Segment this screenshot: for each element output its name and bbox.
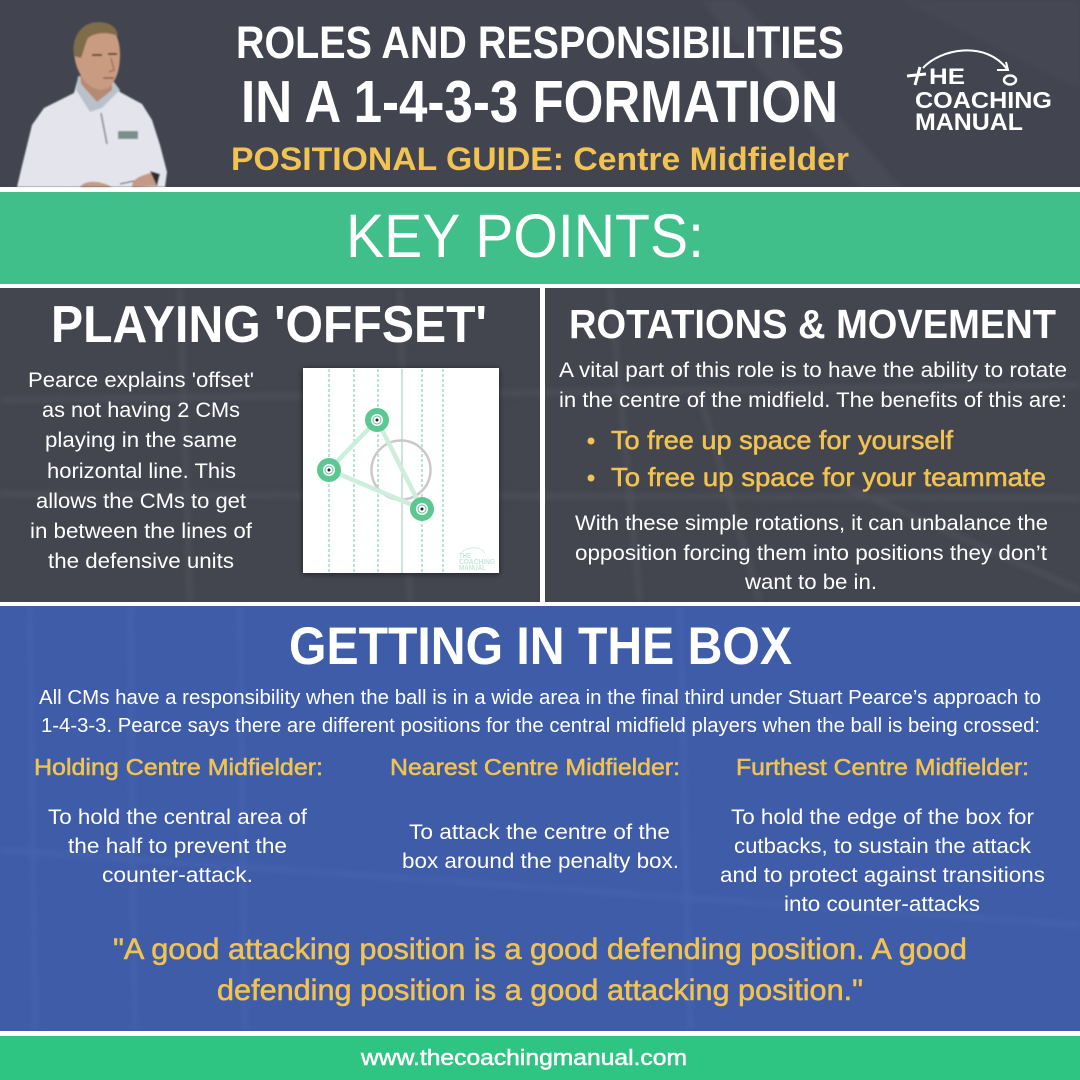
player marker xyxy=(410,497,434,521)
body text xyxy=(28,369,254,573)
diagram watermark logo: THE xyxy=(459,553,471,560)
closing text xyxy=(575,512,1048,594)
player marker xyxy=(365,408,389,432)
logo: The Coaching Manual: MANUAL xyxy=(915,109,1023,136)
column: holding centre midfielder: the half to prevent the xyxy=(68,835,287,858)
logo: The Coaching Manual: HE xyxy=(929,64,965,89)
bullet list: To free up space for yourself xyxy=(611,425,954,455)
intro text: All CMs have a responsibility when the ball is in a wide area in the final third under Stuart Pearce’s approach to xyxy=(39,687,1041,709)
quote xyxy=(113,933,967,1007)
dark panels background xyxy=(0,288,1080,602)
banner heading: KEY POINTS: xyxy=(346,202,704,270)
logo: The Coaching Manual: COACHING xyxy=(915,87,1052,113)
diagram: offset midfield triangle xyxy=(303,368,499,573)
column: nearest centre midfielder: To attack the centre of the xyxy=(409,821,670,844)
column: nearest centre midfielder: box around the penalty box. xyxy=(402,850,679,873)
title: IN A 1-4-3-3 FORMATION xyxy=(241,69,838,135)
player marker xyxy=(317,458,341,482)
column: holding centre midfielder xyxy=(34,754,323,887)
panel: rotations and movement xyxy=(559,301,1067,594)
panel: getting in the box xyxy=(0,606,1080,1031)
panel: playing offset xyxy=(28,296,499,573)
column: furthest centre midfielder: To hold the edge of the box for xyxy=(731,806,1034,829)
subtitle: POSITIONAL GUIDE: Centre Midfielder xyxy=(231,141,849,177)
diagram watermark logo: MANUAL xyxy=(459,565,487,572)
footer xyxy=(0,1036,1080,1080)
intro text xyxy=(39,687,1041,737)
panel divider xyxy=(540,288,545,602)
closing text: want to be in. xyxy=(744,571,877,594)
body text: in between the lines of xyxy=(30,520,252,543)
column: furthest centre midfielder: cutbacks, to sustain the attack xyxy=(734,835,1032,858)
closing text: With these simple rotations, it can unbalance the xyxy=(575,512,1048,535)
diagram watermark logo: COACHING xyxy=(459,559,496,566)
body text: playing in the same xyxy=(45,429,237,452)
column: furthest centre midfielder: and to protect against transitions xyxy=(720,864,1045,887)
quote: "A good attacking position is a good defending position. A good xyxy=(113,933,967,966)
bullet list: To free up space for your teammate xyxy=(611,462,1046,492)
title: ROLES AND RESPONSIBILITIES xyxy=(236,17,844,68)
body text: allows the CMs to get xyxy=(36,490,246,513)
intro text: A vital part of this role is to have the ability to rotate xyxy=(559,359,1067,382)
diagram watermark logo xyxy=(459,548,496,572)
column: holding centre midfielder: To hold the central area of xyxy=(48,806,307,829)
body text: horizontal line. This xyxy=(47,460,236,483)
column: furthest centre midfielder xyxy=(720,754,1045,916)
body text: as not having 2 CMs xyxy=(42,399,240,422)
header panel xyxy=(0,0,1080,187)
column: holding centre midfielder: Holding Centre Midfielder: xyxy=(34,754,323,780)
body text: Pearce explains 'offset' xyxy=(28,369,254,392)
body text: the defensive units xyxy=(48,550,234,573)
website: www.thecoachingmanual.com xyxy=(360,1045,687,1070)
column: furthest centre midfielder: into counter-attacks xyxy=(784,893,980,916)
column: furthest centre midfielder: Furthest Centre Midfielder: xyxy=(736,754,1029,780)
intro text xyxy=(559,359,1067,412)
photo: coach xyxy=(17,22,167,187)
title xyxy=(236,17,844,135)
heading: PLAYING 'OFFSET' xyxy=(51,296,487,354)
heading: GETTING IN THE BOX xyxy=(289,617,792,676)
column: holding centre midfielder: counter-attack. xyxy=(102,864,253,887)
column: nearest centre midfielder xyxy=(390,754,680,873)
heading: ROTATIONS & MOVEMENT xyxy=(569,301,1056,347)
column: nearest centre midfielder: Nearest Centre Midfielder: xyxy=(390,754,680,780)
quote: defending position is a good attacking position." xyxy=(217,974,863,1007)
key points banner xyxy=(0,192,1080,284)
closing text: opposition forcing them into positions they don’t xyxy=(575,542,1047,565)
bullet list xyxy=(588,425,1046,492)
logo: The Coaching Manual xyxy=(907,50,1052,136)
intro text: in the centre of the midfield. The benefits of this are: xyxy=(559,389,1067,412)
intro text: 1-4-3-3. Pearce says there are different positions for the central midfield players when the ball is being crossed: xyxy=(41,715,1040,737)
